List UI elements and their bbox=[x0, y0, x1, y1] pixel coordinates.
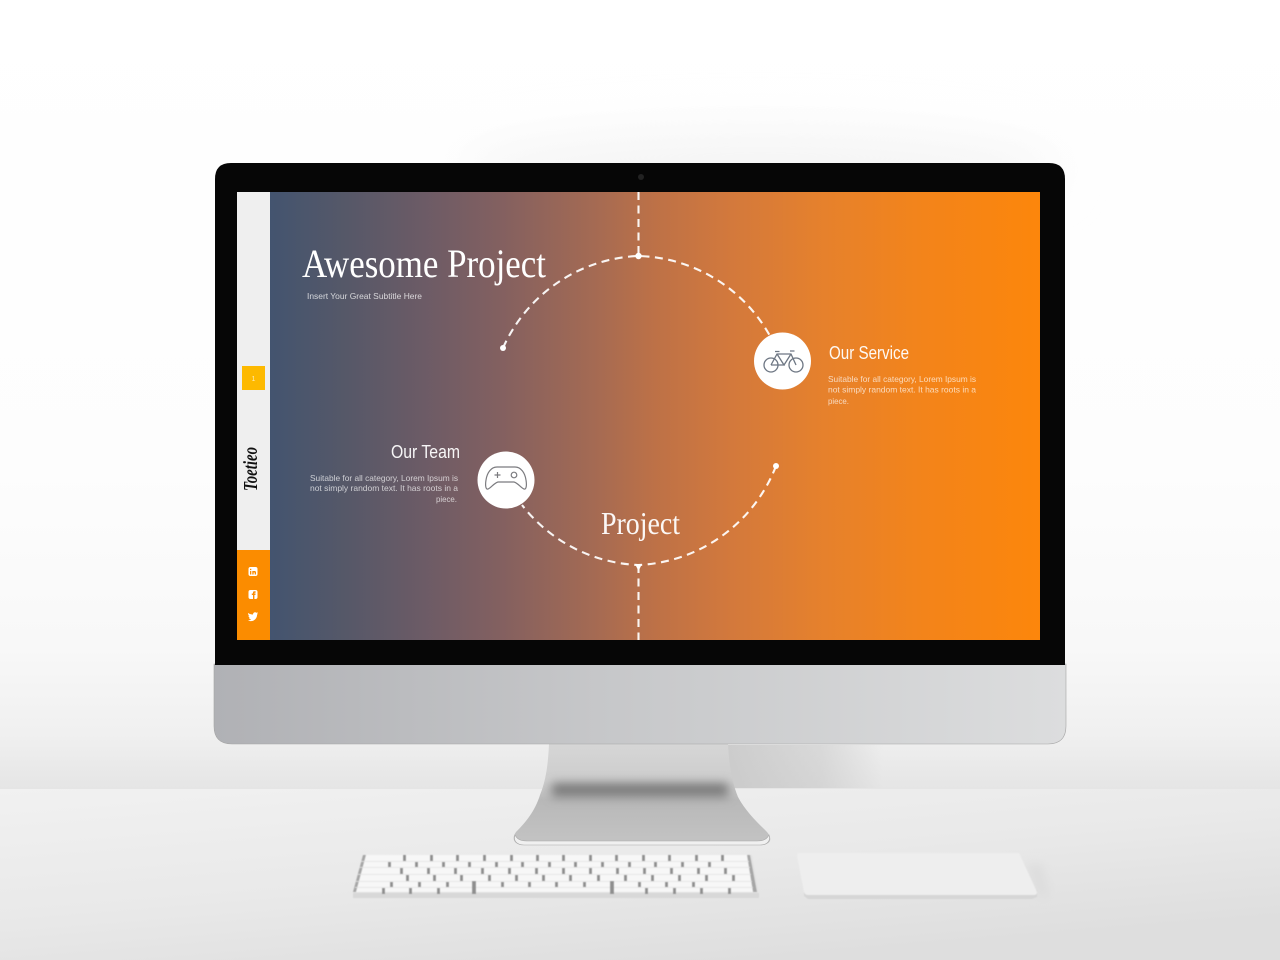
center label: project: Project bbox=[601, 505, 680, 541]
description bbox=[310, 473, 458, 504]
icon: game controller bbox=[478, 452, 534, 508]
upper arc bbox=[503, 256, 770, 348]
page number badge: 1 bbox=[252, 376, 256, 383]
keyboard key gaps bbox=[382, 855, 735, 894]
bottom connector line bbox=[637, 565, 640, 640]
monitor stand bbox=[505, 744, 775, 846]
heading: Our Service bbox=[829, 342, 909, 363]
page number badge bbox=[242, 366, 265, 390]
dashed circle diagram bbox=[503, 192, 776, 640]
slide screen bbox=[237, 192, 1040, 640]
lower arc bbox=[522, 466, 776, 565]
subtitle: Insert Your Great Subtitle Here bbox=[307, 291, 422, 301]
description bbox=[828, 374, 976, 406]
title: Awesome Project bbox=[302, 241, 546, 286]
icon: facebook bbox=[248, 590, 258, 599]
arc end dots bbox=[500, 253, 779, 571]
section: our service bbox=[754, 332, 976, 406]
heading: Our Team bbox=[391, 441, 460, 462]
top connector line bbox=[637, 192, 640, 256]
monitor body bbox=[214, 163, 1066, 744]
icon: twitter bbox=[248, 612, 258, 621]
description: Suitable for all category, Lorem Ipsum is bbox=[828, 374, 976, 384]
section: our team bbox=[310, 441, 534, 508]
sidebar brand text: Toetieo bbox=[240, 447, 262, 491]
webcam bbox=[638, 174, 644, 180]
icon: linkedin bbox=[248, 567, 258, 576]
keyboard bbox=[353, 855, 759, 898]
sidebar bbox=[237, 192, 270, 640]
gradient background bbox=[270, 192, 1040, 640]
description: not simply random text. It has roots in a bbox=[828, 384, 976, 394]
monitor bezel bbox=[215, 163, 1065, 665]
icon: bicycle bbox=[754, 332, 811, 390]
social panel bbox=[237, 550, 270, 640]
description: piece. bbox=[828, 396, 849, 406]
description: Suitable for all category, Lorem Ipsum is bbox=[310, 473, 458, 483]
monitor chin bbox=[214, 664, 1066, 744]
trackpad bbox=[797, 853, 1037, 899]
description: piece. bbox=[436, 494, 457, 504]
description: not simply random text. It has roots in a bbox=[310, 483, 458, 493]
